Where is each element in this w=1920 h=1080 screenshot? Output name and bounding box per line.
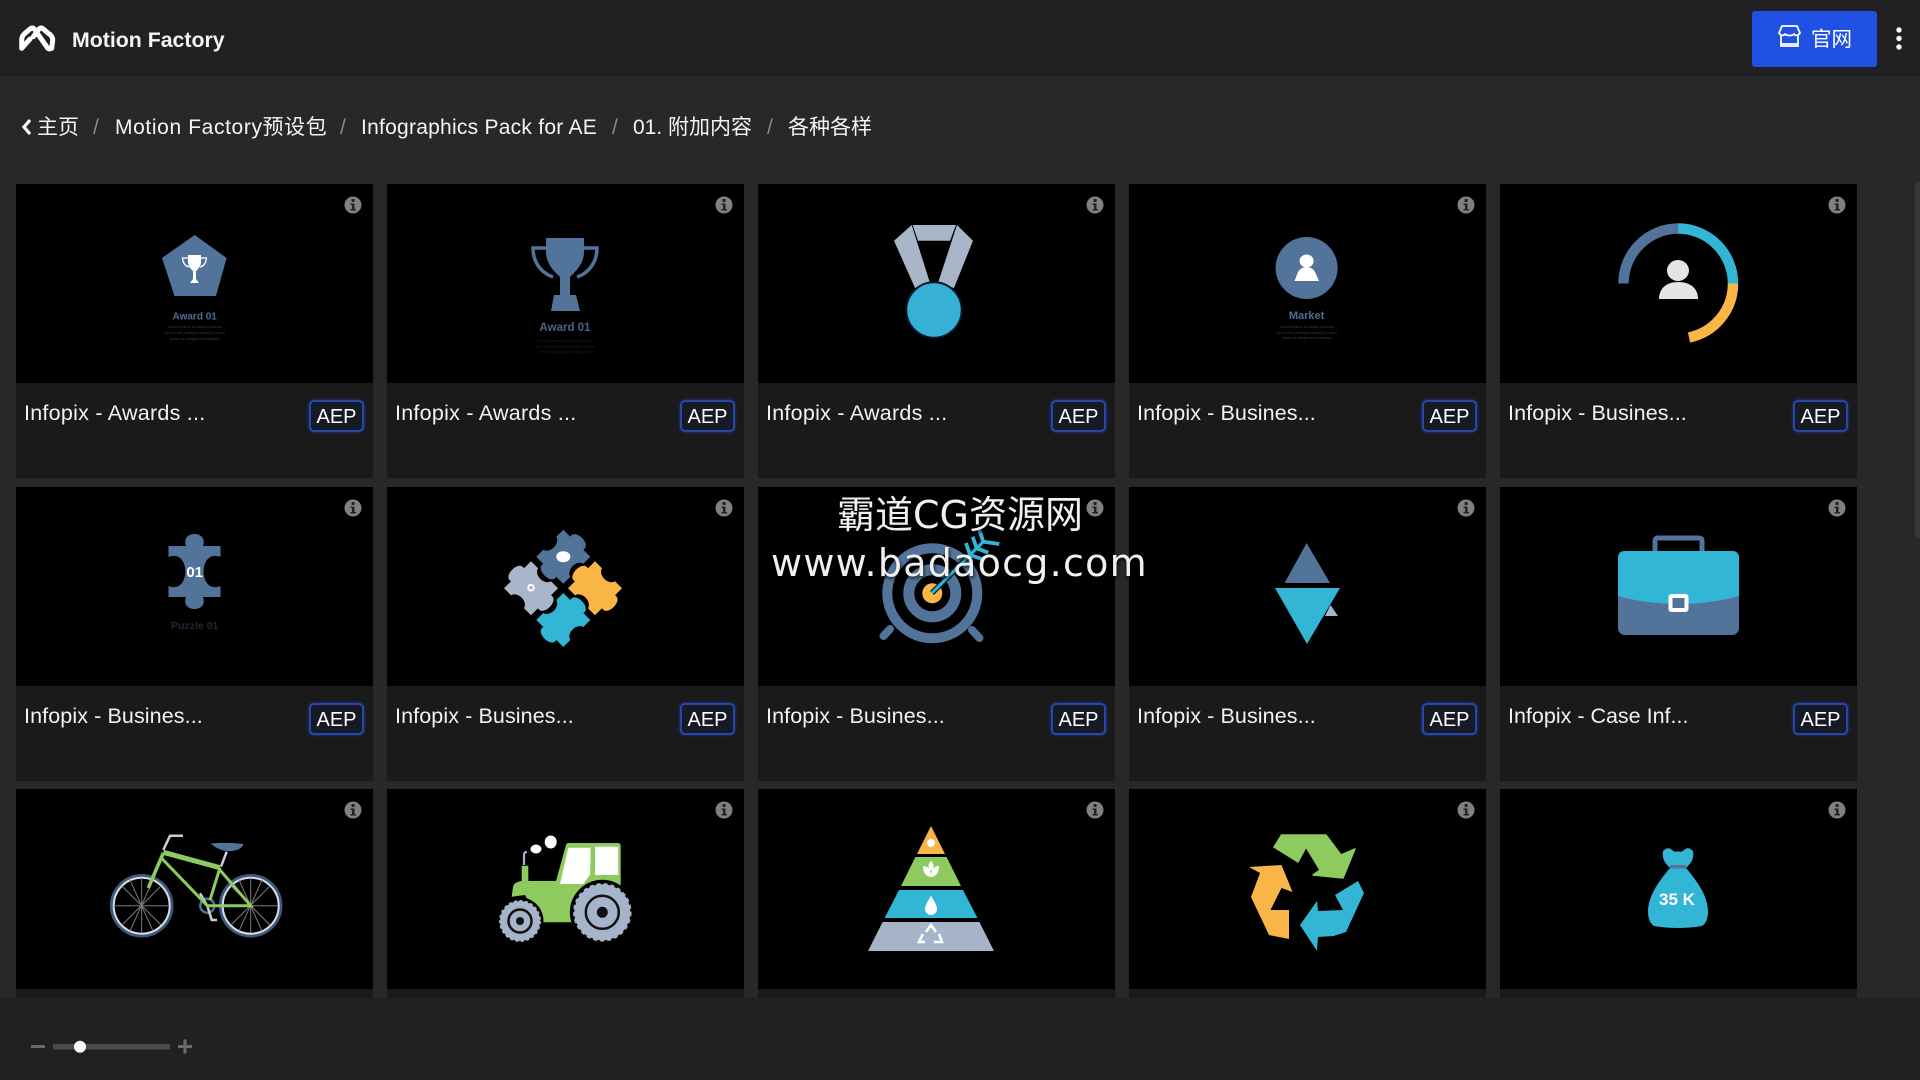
card: Awards pentagon <box>16 184 373 478</box>
card: pyramid <box>758 789 1115 998</box>
card: tractor <box>387 789 744 998</box>
info icon <box>1458 196 1474 214</box>
icon: bicycle <box>110 834 282 938</box>
watermark: site name: 霸道CG资源网 <box>837 493 1083 537</box>
format badge <box>1051 400 1106 432</box>
info icon <box>1828 802 1846 818</box>
format badge <box>1051 703 1106 735</box>
icon: market person: Market <box>1289 310 1325 322</box>
icon: market person: Ipsum is simply text industry <box>1282 335 1332 340</box>
info icon <box>1086 500 1104 516</box>
thumbnail <box>1129 184 1486 383</box>
card: bicycle <box>16 789 373 998</box>
icon: pentagon award <box>162 235 227 341</box>
icon: target with arrow <box>880 530 1000 644</box>
format badge: AEP <box>1429 406 1470 428</box>
thumbnail <box>758 487 1115 686</box>
brand name: Motion Factory <box>72 28 225 52</box>
icon: trophy: Lorem ipsum is simply dummy <box>538 338 592 343</box>
card: Awards trophy <box>387 184 744 478</box>
thumbnail <box>16 789 373 989</box>
title: Infopix - Awards ... <box>395 401 576 425</box>
thumbnail <box>16 184 373 383</box>
thumbnail <box>758 789 1115 989</box>
thumbnail <box>1500 789 1857 989</box>
format badge <box>1422 400 1477 432</box>
info icon <box>344 802 362 818</box>
crumb separators: / <box>93 116 99 139</box>
info icon <box>1086 196 1104 214</box>
icon: donut ring with person <box>1618 223 1738 343</box>
icon: pentagon award: Award 01 <box>173 312 217 322</box>
zoom slider <box>31 1040 192 1054</box>
format badge: AEP <box>316 406 357 428</box>
card: Business market <box>1129 184 1486 478</box>
icon: market person: Lorem ipsum is simply dummy <box>1280 324 1333 329</box>
info icon <box>1458 802 1474 818</box>
icon: money bag: 35 K <box>1659 890 1696 909</box>
card: Business triangles <box>1129 487 1486 781</box>
icon: pentagon award: Lorem ipsum is simply dummy <box>168 324 222 329</box>
info icon <box>344 500 362 516</box>
button label: 官网 <box>1811 28 1852 51</box>
format badge <box>1422 703 1477 735</box>
info icon <box>344 196 362 214</box>
icon: trophy <box>531 238 599 354</box>
icon: recycle arrows <box>1249 834 1364 951</box>
crumb separators: / <box>767 116 773 139</box>
info icon <box>716 500 732 516</box>
thumbnail <box>1500 184 1857 383</box>
format badge: AEP <box>1800 709 1841 731</box>
crumb separators <box>93 116 773 139</box>
icon: more menu <box>1896 27 1902 50</box>
crumb: add-ons: 01. 附加内容 <box>633 116 752 139</box>
scrollbar thumb <box>1915 182 1920 538</box>
info icon <box>1458 500 1474 516</box>
card: Business target <box>758 487 1115 781</box>
title: Infopix - Awards ... <box>24 401 205 425</box>
card: Business puzzle group <box>387 487 744 781</box>
format badge: AEP <box>1058 709 1099 731</box>
thumbnail <box>16 487 373 686</box>
icon: pentagon award: text of the printing industry. Lorem <box>165 330 225 335</box>
format badge <box>1793 400 1848 432</box>
card: Case info briefcase <box>1500 487 1857 781</box>
thumbnail <box>1500 487 1857 686</box>
breadcrumb navigation <box>22 116 872 139</box>
icon: briefcase <box>1618 536 1739 635</box>
format badge <box>309 400 364 432</box>
info icon <box>1828 500 1846 516</box>
footer bar <box>0 998 1920 1080</box>
format badge <box>680 400 735 432</box>
format badge <box>680 703 735 735</box>
title: Infopix - Busines... <box>1137 401 1316 425</box>
info icon <box>716 196 732 214</box>
card: Business donut person <box>1500 184 1857 478</box>
icon: money bag <box>1648 848 1708 928</box>
card: recycle <box>1129 789 1486 998</box>
official site button <box>1752 11 1877 67</box>
card: Business puzzle 01 <box>16 487 373 781</box>
info icon <box>1086 802 1104 818</box>
thumbnail <box>1129 789 1486 989</box>
icon: market person <box>1276 237 1338 340</box>
thumbnail <box>387 184 744 383</box>
format badge <box>1793 703 1848 735</box>
header bar <box>0 0 1920 76</box>
card: Awards medal <box>758 184 1115 478</box>
crumb: infographics pack: Infographics Pack for AE <box>361 116 597 139</box>
icon: trophy: Ipsum is simply text industry <box>540 349 590 354</box>
card: money bag <box>1500 789 1857 998</box>
format badge: AEP <box>1429 709 1470 731</box>
icon: market person: text of the printing industry. Lorem <box>1277 330 1337 335</box>
icon: opposing triangles <box>1275 543 1340 644</box>
icon: Motion Factory logo <box>19 26 56 52</box>
icon: medal <box>894 225 973 339</box>
format badge: AEP <box>316 709 357 731</box>
format badge: AEP <box>687 406 728 428</box>
icon: back chevron <box>22 119 32 135</box>
icon: tractor <box>499 836 632 942</box>
icon: layered pyramid <box>868 826 994 951</box>
crumb separators: / <box>612 116 618 139</box>
crumb separators: / <box>340 116 346 139</box>
title: Infopix - Busines... <box>1508 401 1687 425</box>
thumbnail <box>1129 487 1486 686</box>
icon: puzzle piece 01: 01 <box>186 564 203 581</box>
icon: trophy: text of the printing industry. Lorem <box>535 344 596 349</box>
crumb: home: 主页 <box>37 116 79 139</box>
title: Infopix - Case Inf... <box>1508 704 1688 728</box>
watermark: url: www.badaocg.com <box>771 541 1148 585</box>
icon: trophy: Award 01 <box>540 322 591 334</box>
title: Infopix - Busines... <box>766 704 945 728</box>
info icon <box>716 802 732 818</box>
format badge: AEP <box>687 709 728 731</box>
thumbnail <box>387 789 744 989</box>
format badge: AEP <box>1058 406 1099 428</box>
thumbnail <box>758 184 1115 383</box>
info icon <box>1828 196 1846 214</box>
title: Infopix - Busines... <box>1137 704 1316 728</box>
icon: puzzle piece 01: Puzzle 01 <box>171 620 218 632</box>
icon: store <box>1778 25 1801 47</box>
crumb: preset pack: Motion Factory预设包 <box>115 116 327 139</box>
format badge: AEP <box>1800 406 1841 428</box>
icon: four puzzle pieces <box>504 530 622 647</box>
crumb: miscellaneous: 各种各样 <box>788 116 872 139</box>
thumbnail <box>387 487 744 686</box>
title: Infopix - Awards ... <box>766 401 947 425</box>
title: Infopix - Busines... <box>395 704 574 728</box>
icon: pentagon award: Ipsum is simply text industry <box>170 336 220 341</box>
icon: puzzle piece 01 <box>168 534 220 632</box>
format badge <box>309 703 364 735</box>
title: Infopix - Busines... <box>24 704 203 728</box>
